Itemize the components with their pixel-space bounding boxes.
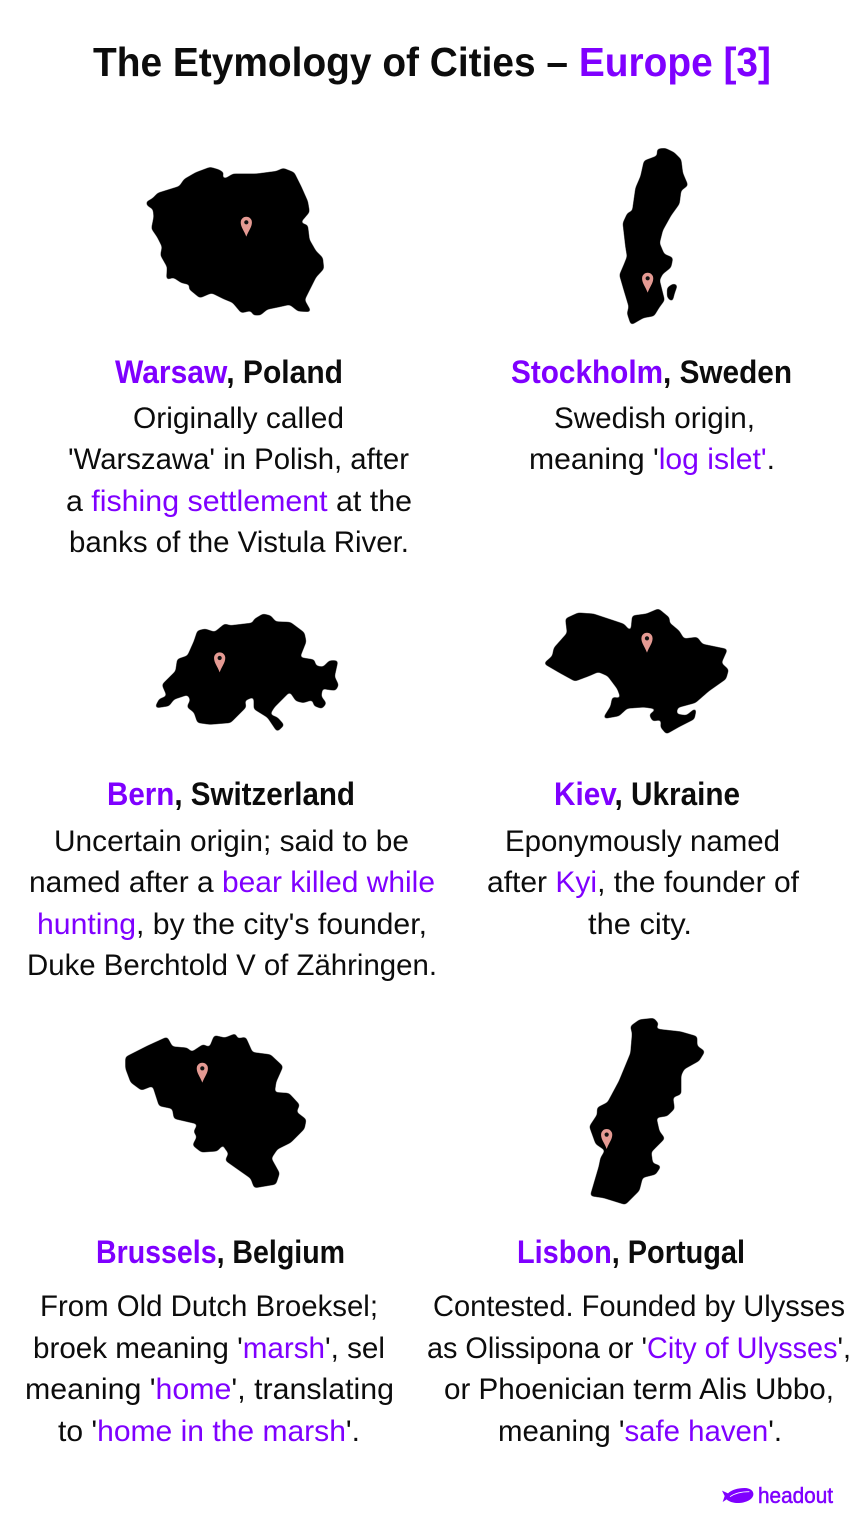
text: Stockholm description [529, 402, 775, 476]
icon: blimp [722, 1488, 753, 1503]
text: Kiev description [487, 825, 800, 941]
text: Brussels description: broek meaning 'marsh', sel [33, 1332, 385, 1365]
text: Brussels description: From Old Dutch Broeksel; [40, 1290, 378, 1323]
text: Bern description [27, 825, 437, 982]
heading: Kiev, Ukraine: Kiev, Ukraine [554, 776, 740, 812]
text: Brussels description [25, 1290, 394, 1448]
wordmark: headout [758, 1483, 833, 1508]
text: Bern description: named after a bear killed while [29, 866, 435, 899]
text: Brussels description: meaning 'home', translating [25, 1373, 394, 1406]
panel: Bern, Switzerland [27, 615, 437, 982]
text: Warsaw description: a fishing settlement at the [66, 485, 412, 518]
panel: Kiev, Ukraine [487, 610, 800, 941]
map: Poland with pin [147, 168, 323, 314]
text: Bern description: Duke Berchtold V of Zähringen. [27, 949, 437, 982]
heading: Stockholm, Sweden: Stockholm, Sweden [511, 354, 792, 390]
map: Belgium with pin [127, 1035, 305, 1187]
text: Kiev description: the city. [588, 908, 692, 941]
text: Warsaw description: Originally called [133, 402, 344, 435]
text: Bern description: Uncertain origin; said to be [54, 825, 409, 858]
text: Brussels description: to 'home in the marsh'. [58, 1415, 360, 1448]
text: Kiev description: after Kyi, the founder of [487, 866, 800, 899]
title: The Etymology of Cities – Europe [3] [93, 39, 771, 85]
text: Warsaw description: 'Warszawa' in Polish, after [68, 443, 409, 476]
text: Lisbon description: as Olissipona or 'City of Ulysses', [427, 1332, 851, 1365]
text: Lisbon description: or Phoenician term Alis Ubbo, [444, 1373, 834, 1406]
text: Lisbon description: meaning 'safe haven'. [498, 1415, 782, 1448]
heading: Warsaw, Poland: Warsaw, Poland [115, 354, 343, 390]
map: Switzerland with pin [157, 615, 337, 730]
text: Stockholm description: Swedish origin, [554, 402, 755, 435]
panel: Brussels, Belgium [25, 1035, 394, 1448]
map: Ukraine with pin [546, 610, 727, 733]
text: Warsaw description: banks of the Vistula River. [69, 526, 409, 559]
panel: Lisbon, Portugal [427, 1019, 851, 1448]
text: Warsaw description [66, 402, 412, 559]
text: Lisbon description [427, 1290, 851, 1448]
logo: headout [722, 1483, 833, 1508]
map: Sweden with pin [621, 149, 687, 323]
map: Portugal with pin [591, 1019, 703, 1203]
heading: Lisbon, Portugal: Lisbon, Portugal [517, 1234, 745, 1270]
text: Lisbon description: Contested. Founded by Ulysses [433, 1290, 845, 1323]
text: Bern description: hunting, by the city's founder, [37, 908, 427, 941]
text: Kiev description: Eponymously named [505, 825, 780, 858]
heading: Brussels, Belgium: Brussels, Belgium [96, 1234, 345, 1270]
heading: Bern, Switzerland: Bern, Switzerland [107, 776, 355, 812]
text: Stockholm description: meaning 'log islet'. [529, 443, 775, 476]
panel: Warsaw, Poland [66, 168, 412, 559]
panel: Stockholm, Sweden [511, 149, 792, 476]
